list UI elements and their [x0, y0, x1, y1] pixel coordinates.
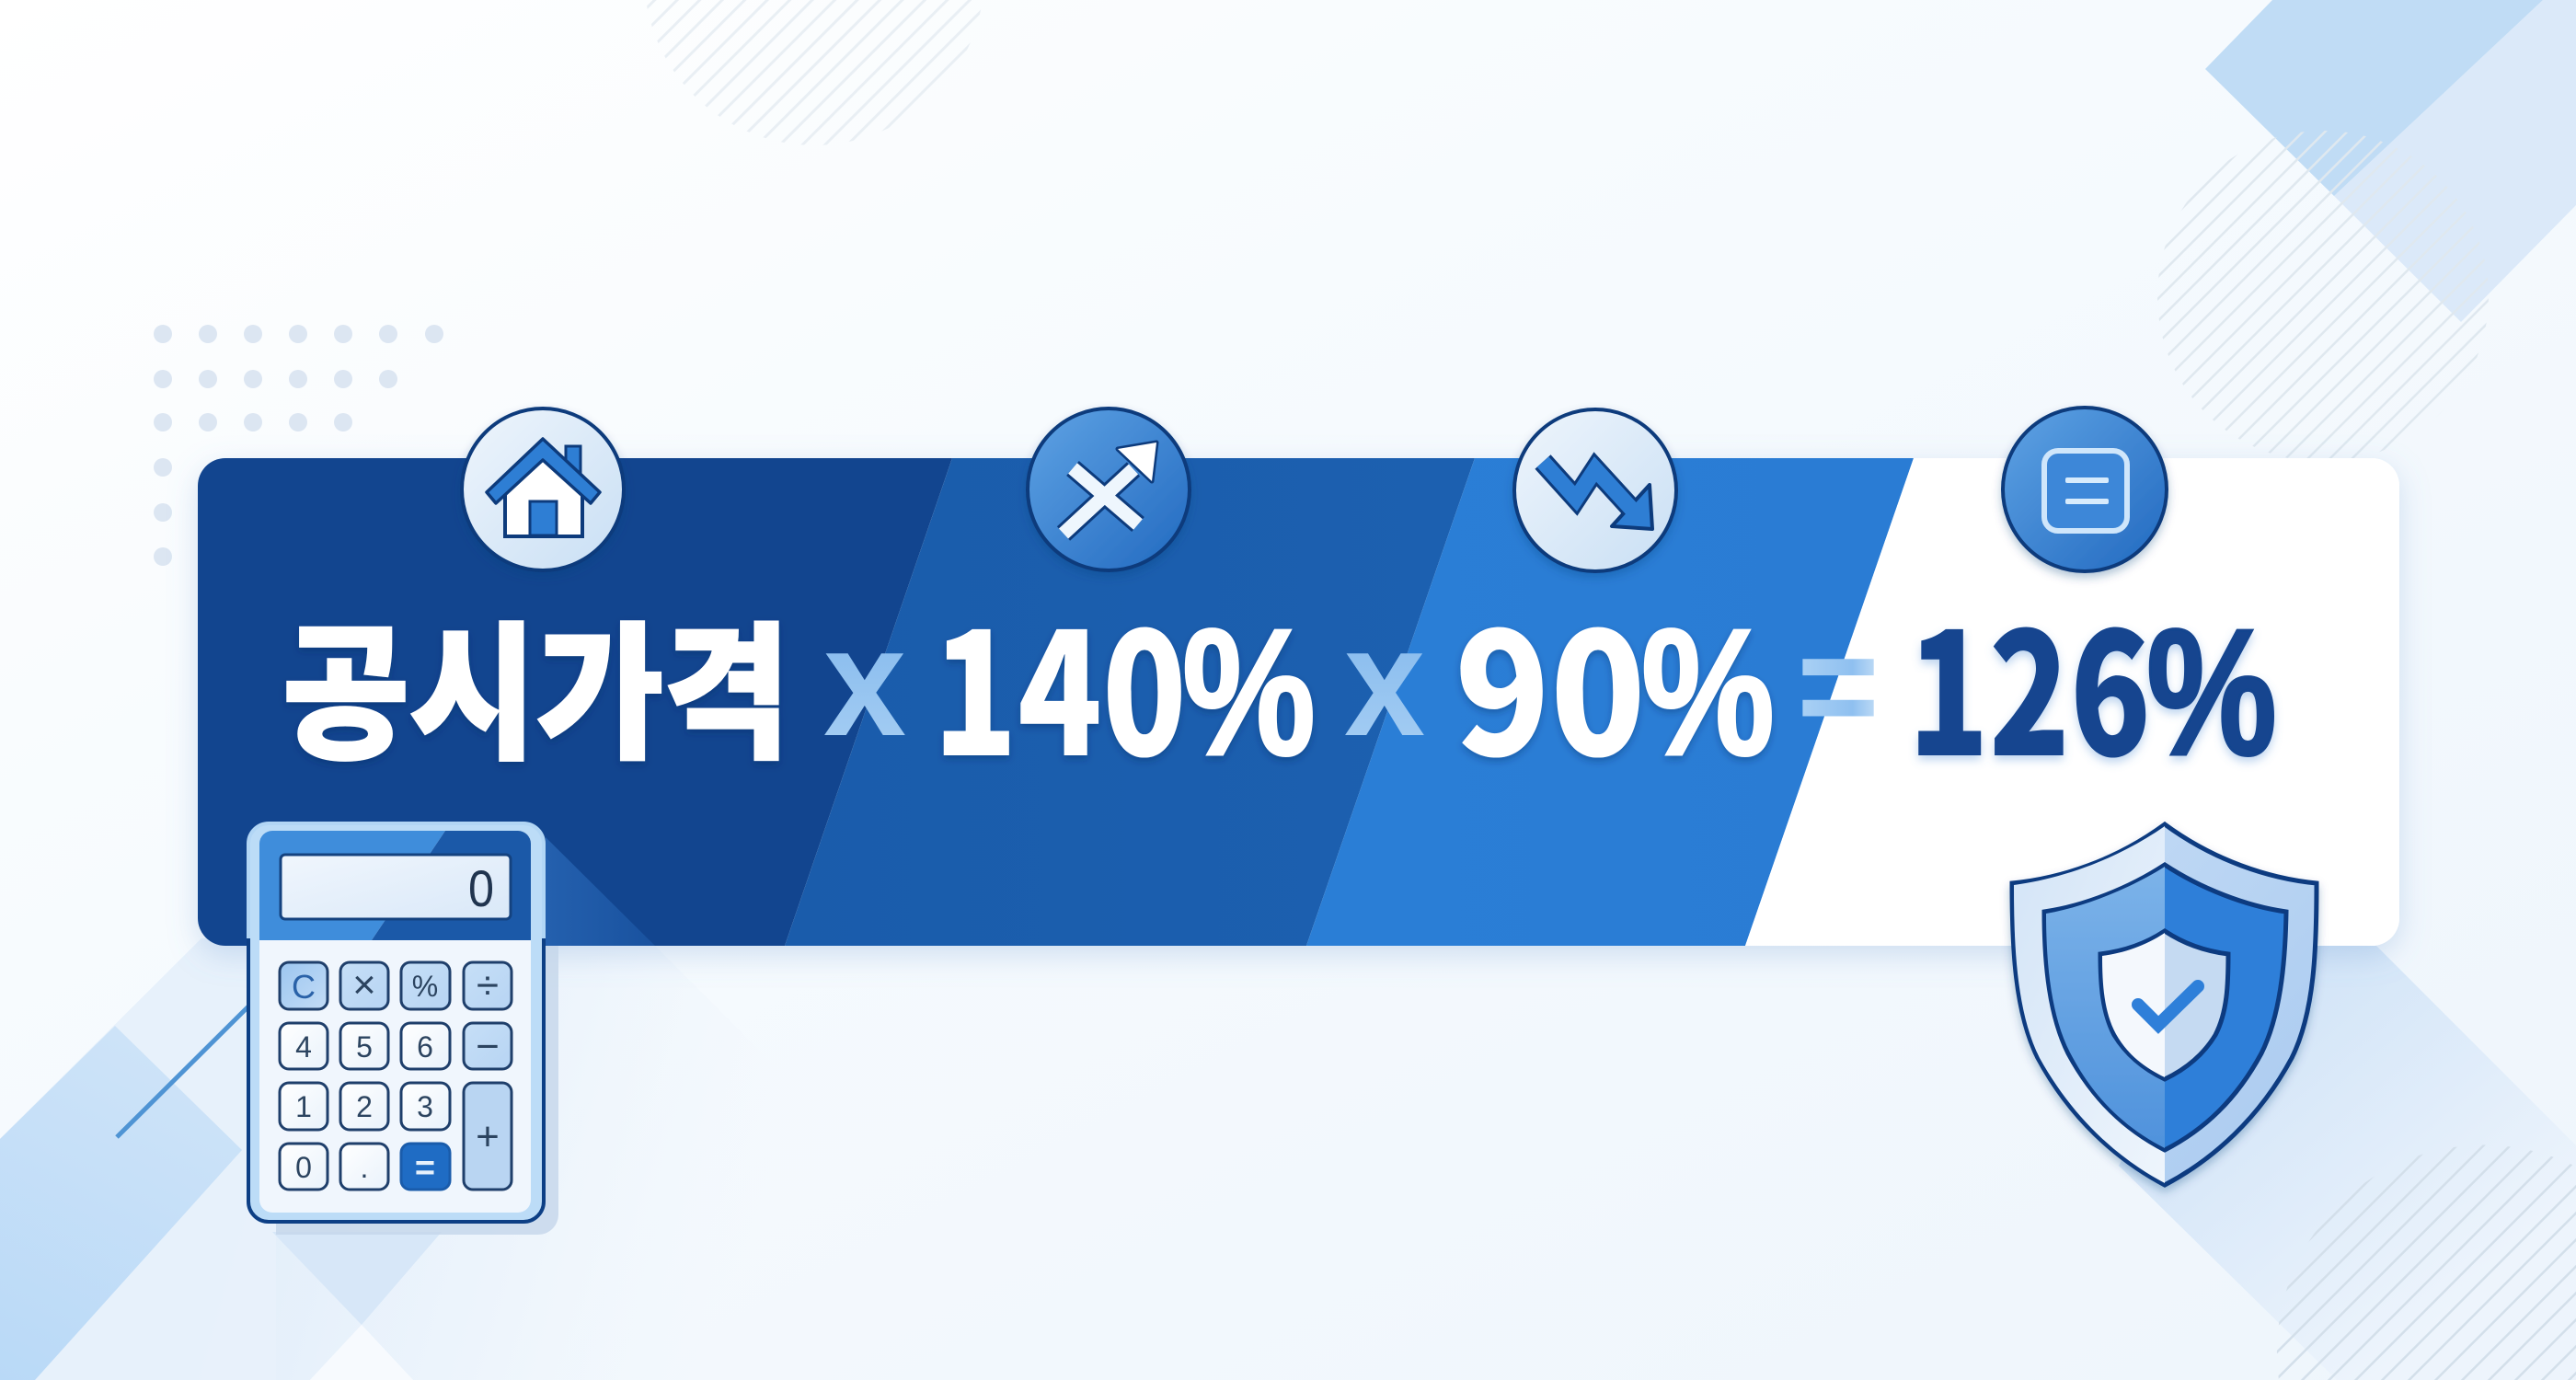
segment: 90%	[1306, 458, 1914, 946]
icon: equals card	[2003, 408, 2167, 571]
formula text	[282, 559, 2277, 804]
calculator display	[281, 855, 511, 919]
calculator header	[259, 831, 531, 940]
calculator key labels: 1	[295, 1090, 312, 1123]
shield inner	[2044, 865, 2286, 1150]
icon: house	[462, 408, 624, 570]
icon: calculator	[248, 823, 558, 1235]
calculator key labels: +	[476, 1114, 500, 1159]
decorative shapes: top right	[2205, 0, 2576, 322]
number: 140%: %	[1182, 592, 1316, 793]
dot grid	[154, 325, 443, 566]
icon: shield with check	[2012, 824, 2317, 1185]
hatch circle: bottom right	[2277, 1145, 2576, 1380]
number: 90%: 90	[1455, 559, 1646, 804]
calculator keys	[280, 962, 512, 1190]
operator: x: x	[823, 595, 906, 768]
calculator key labels: 2	[356, 1090, 373, 1123]
operator: x: x	[1344, 595, 1425, 768]
panel: formula bar	[198, 458, 2399, 946]
calculator key labels: 5	[356, 1030, 373, 1064]
diagonal accent line	[117, 1005, 250, 1137]
bar overlay near calculator	[546, 837, 655, 946]
number: 126%: %	[2146, 592, 2277, 793]
hatch circle: top right	[2157, 131, 2489, 462]
calculator key labels: ×	[352, 962, 376, 1007]
text: 공시가격: 공시가격	[282, 576, 790, 789]
calculator key labels: =	[415, 1149, 435, 1188]
calculator key labels: 3	[417, 1090, 433, 1123]
calculator display: 0	[468, 859, 494, 917]
segment: 140%	[785, 458, 1475, 946]
calculator key labels: 6	[417, 1030, 433, 1064]
shield core	[2100, 931, 2228, 1079]
segment: base price	[198, 458, 952, 946]
check mark	[2138, 986, 2198, 1025]
icon: crossed arrow	[1028, 408, 1190, 570]
calculator key labels: ÷	[477, 963, 499, 1008]
number: 140%: 140	[933, 559, 1187, 804]
calculator key labels: 0	[295, 1151, 312, 1184]
calculator key labels: .	[361, 1151, 368, 1184]
number: 90%: %	[1641, 592, 1775, 793]
decorative shape: bottom right	[2119, 946, 2576, 1380]
operator: equals: =	[1797, 601, 1880, 770]
number: 126%: 126	[1908, 559, 2151, 804]
calculator key labels	[292, 962, 500, 1188]
icon: zigzag down arrow	[1514, 409, 1676, 571]
calculator key labels: C	[292, 968, 316, 1006]
segment: result	[1745, 458, 2399, 946]
calculator key labels: −	[476, 1024, 500, 1069]
calculator key labels: 4	[295, 1030, 312, 1064]
calculator key labels: %	[412, 970, 438, 1003]
hatch circle: top	[646, 0, 983, 145]
number: 90%	[1455, 559, 1775, 804]
shield outer	[2012, 824, 2317, 1185]
decorative shapes: bottom left	[0, 938, 920, 1380]
